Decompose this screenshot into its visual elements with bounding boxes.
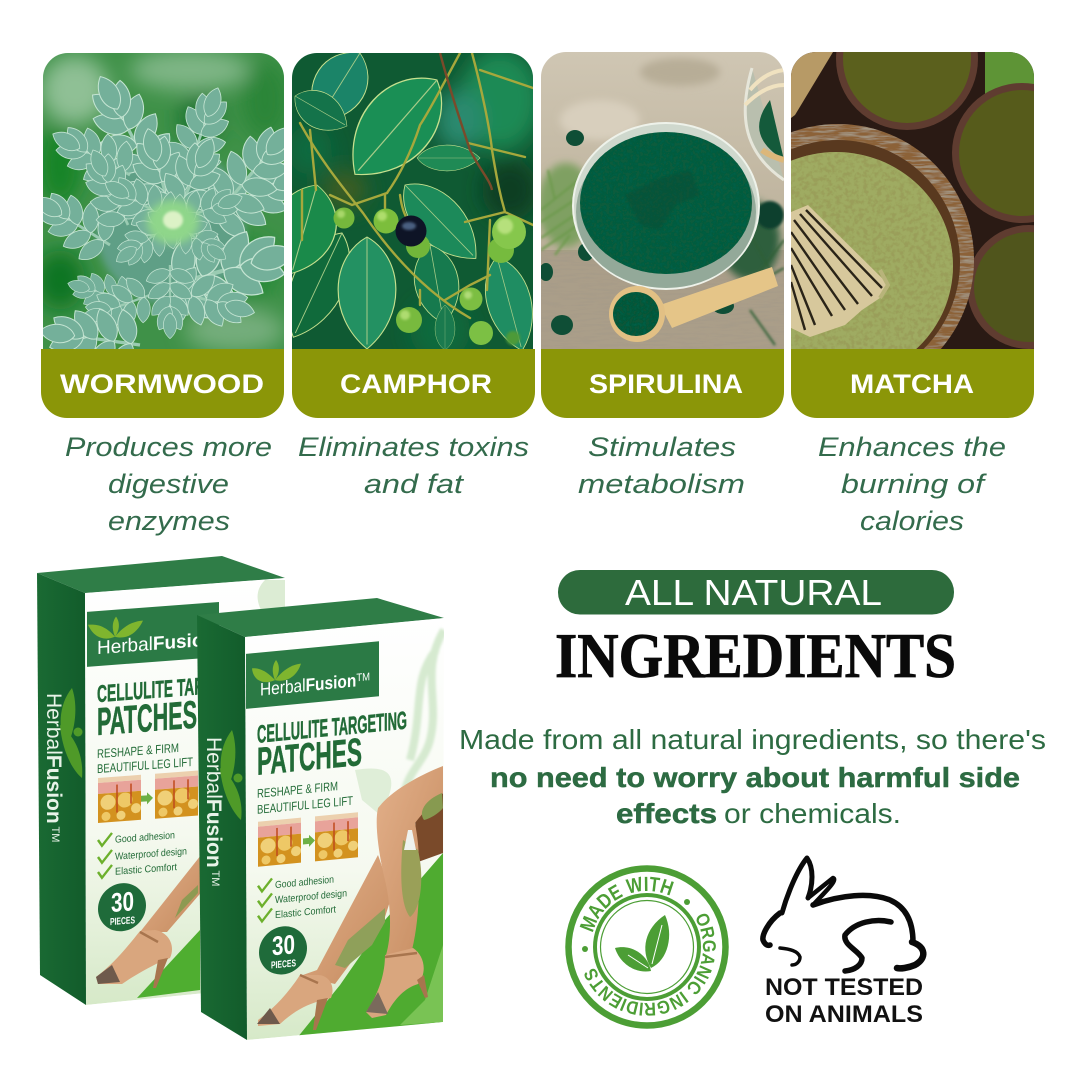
body text: no need to worry about harmful side	[490, 762, 1020, 793]
checklist	[258, 878, 272, 922]
wooden bowl	[791, 124, 974, 349]
description: spirulina	[578, 432, 745, 499]
bamboo whisk	[791, 205, 888, 337]
rabbit outline	[763, 858, 923, 971]
leg A	[377, 766, 443, 955]
spine text: back box: Herbal Fusion	[42, 693, 65, 824]
jar	[745, 68, 784, 180]
30 pieces badge	[98, 881, 146, 933]
logo band: back box: Waterproof design	[115, 846, 187, 863]
description: spirulina: metabolism	[578, 469, 745, 499]
label band: spirulina	[541, 349, 784, 418]
card: wormwood	[41, 53, 284, 536]
label: MATCHA: MATCHA	[850, 369, 974, 399]
body text	[459, 724, 1046, 829]
product box: front	[197, 598, 444, 1040]
label: CAMPHOR: CAMPHOR	[340, 369, 492, 399]
skin cubes	[258, 818, 301, 867]
powder	[580, 132, 752, 274]
description: camphor: Eliminates toxins	[298, 432, 529, 462]
badge: made with organic ingredients	[565, 865, 729, 1029]
shoes	[258, 975, 333, 1026]
label band: camphor	[292, 349, 535, 418]
logo band: front box: HerbalFusion	[260, 670, 365, 700]
description: matcha: burning of	[841, 469, 987, 499]
description: wormwood: digestive	[108, 469, 229, 499]
30 pieces badge	[259, 924, 307, 977]
front face: front box	[245, 618, 444, 1040]
description: matcha	[818, 432, 1006, 536]
wooden spoon	[660, 267, 778, 328]
badge stars	[582, 899, 690, 952]
spine leaf: back box	[60, 688, 82, 778]
description: wormwood: enzymes	[108, 506, 230, 536]
logo band: back box: PIECES	[110, 915, 135, 928]
smoke wisps	[405, 630, 444, 790]
logo band: front box: Good adhesion	[275, 875, 334, 891]
logo band: back box: BEAUTIFUL LEG LIFT	[97, 755, 193, 776]
spine leaf: front box	[220, 730, 242, 820]
logo band: front box: Elastic Comfort	[275, 904, 336, 921]
logo band: front box: RESHAPE & FIRM	[257, 779, 338, 801]
logo band: front box: TM	[356, 671, 370, 684]
logo leaves	[88, 616, 143, 639]
photo: spirulina powder bowl	[538, 52, 784, 350]
logo band: front box: PIECES	[271, 958, 296, 972]
leg B	[300, 855, 392, 984]
logo band: front box: PATCHES	[257, 731, 362, 784]
photo: camphor branch with berries	[292, 53, 533, 349]
powder	[791, 152, 953, 349]
front face: back box	[85, 578, 285, 1005]
logo band: front box: 30	[272, 929, 295, 961]
body text: effects	[616, 798, 717, 829]
legs and heels	[257, 766, 443, 1030]
logo band: front box: BEAUTIFUL LEG LIFT	[257, 794, 353, 817]
heading: INGREDIENTS: INGREDIENTS	[555, 621, 956, 691]
description: camphor: and fat	[364, 469, 465, 499]
description: wormwood	[65, 432, 272, 536]
logo band: back box: HerbalFusion	[97, 629, 215, 659]
product box: back	[37, 556, 285, 1005]
leg and shoe: back box	[96, 850, 205, 988]
description: camphor	[298, 432, 529, 499]
label band: matcha	[791, 349, 1034, 418]
pill heading: ALL NATURAL	[558, 570, 954, 614]
logo leaves	[252, 660, 301, 682]
spine text: front box: Herbal Fusion	[202, 737, 225, 868]
caption	[765, 974, 923, 1028]
pill heading: ALL NATURAL: ALL NATURAL	[625, 572, 882, 613]
glass bowl	[573, 123, 759, 289]
card: camphor	[292, 53, 535, 494]
label band: wormwood	[41, 349, 284, 418]
description: spirulina: Stimulates	[588, 432, 736, 462]
photo: wormwood plant	[43, 53, 284, 349]
photo: matcha powder and tea cups	[791, 52, 1034, 349]
green swoosh	[297, 853, 443, 1038]
patches on legs	[401, 840, 421, 917]
badge lettering: MADE WITH	[580, 876, 674, 932]
product title: CELLULITE TARG	[97, 672, 215, 708]
body text: Made from all natural ingredients, so there's	[459, 724, 1046, 755]
body text: or chemicals.	[724, 798, 901, 829]
logo band: back box: Elastic Comfort	[115, 862, 177, 878]
berries	[334, 208, 526, 345]
description: matcha: calories	[860, 506, 964, 536]
caption: ON ANIMALS	[765, 1001, 923, 1028]
caption: NOT TESTED	[765, 974, 923, 1001]
logo band: back box	[87, 602, 219, 934]
logo band: front box: Waterproof design	[275, 888, 347, 906]
description: matcha: Enhances the	[818, 432, 1006, 462]
checklist	[98, 833, 112, 878]
logo band: back box: RESHAPE & FIRM	[97, 741, 179, 761]
tea cups	[836, 52, 1034, 349]
pills	[539, 130, 784, 335]
skin cubes	[98, 775, 141, 823]
logo band: back box: 30	[111, 886, 134, 918]
logo band: back box: Good adhesion	[115, 830, 175, 846]
badge leaf check	[615, 915, 669, 972]
branches	[300, 53, 533, 318]
badge lettering: lower arc: ORGANIC INGRIDIENTS	[584, 914, 716, 1016]
herbs	[541, 170, 784, 345]
spine text: front box: TM	[209, 868, 221, 886]
card: matcha	[791, 52, 1034, 530]
label: WORMWOOD: WORMWOOD	[60, 369, 264, 399]
card: spirulina	[538, 52, 784, 499]
label: SPIRULINA: SPIRULINA	[589, 369, 743, 399]
description: wormwood: Produces more	[65, 432, 272, 462]
logo band: front box	[246, 639, 407, 978]
icon: rabbit, not tested on animals	[763, 858, 923, 1028]
product title: CELLULITE TARGETING	[257, 707, 407, 749]
spine text: back box: TM	[49, 824, 61, 842]
logo band: back box: PATCHES	[97, 694, 197, 744]
